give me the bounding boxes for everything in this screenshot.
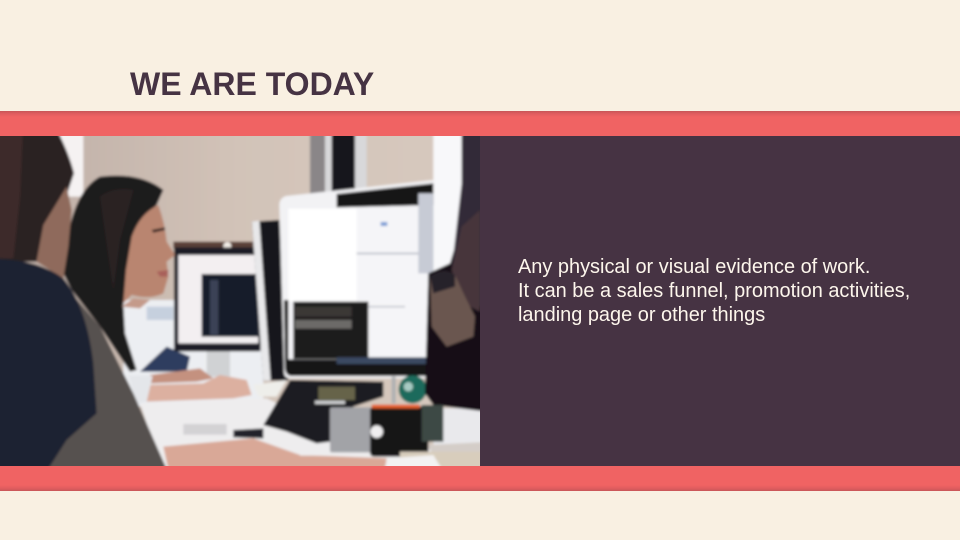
background monitor: [174, 247, 261, 351]
second woman sweater: [30, 293, 170, 477]
photo: team working at computers: [0, 136, 480, 466]
desk: [140, 398, 493, 483]
phone: [263, 380, 383, 443]
first woman hair: [0, 117, 74, 262]
side monitor: [252, 220, 288, 381]
body text: It can be a sales funnel, promotion activities,: [518, 280, 910, 302]
first woman dark top: [0, 258, 97, 477]
bottom red band: [0, 466, 960, 491]
body text: [518, 256, 910, 326]
body text: Any physical or visual evidence of work.: [518, 256, 870, 278]
panel: dark text panel: [480, 136, 960, 466]
mug and speaker: [330, 407, 372, 452]
top red band: [0, 111, 960, 136]
wall: [0, 117, 493, 483]
main monitor: [279, 180, 433, 378]
hands: [150, 368, 213, 383]
globe: [399, 375, 427, 403]
second woman hair: [63, 176, 163, 372]
second woman face: [123, 205, 175, 303]
right dark monitor: [425, 197, 500, 413]
desk background: [123, 300, 263, 407]
body text: landing page or other things: [518, 304, 765, 326]
title: WE ARE TODAY: [130, 66, 374, 102]
first woman face: [37, 187, 72, 278]
